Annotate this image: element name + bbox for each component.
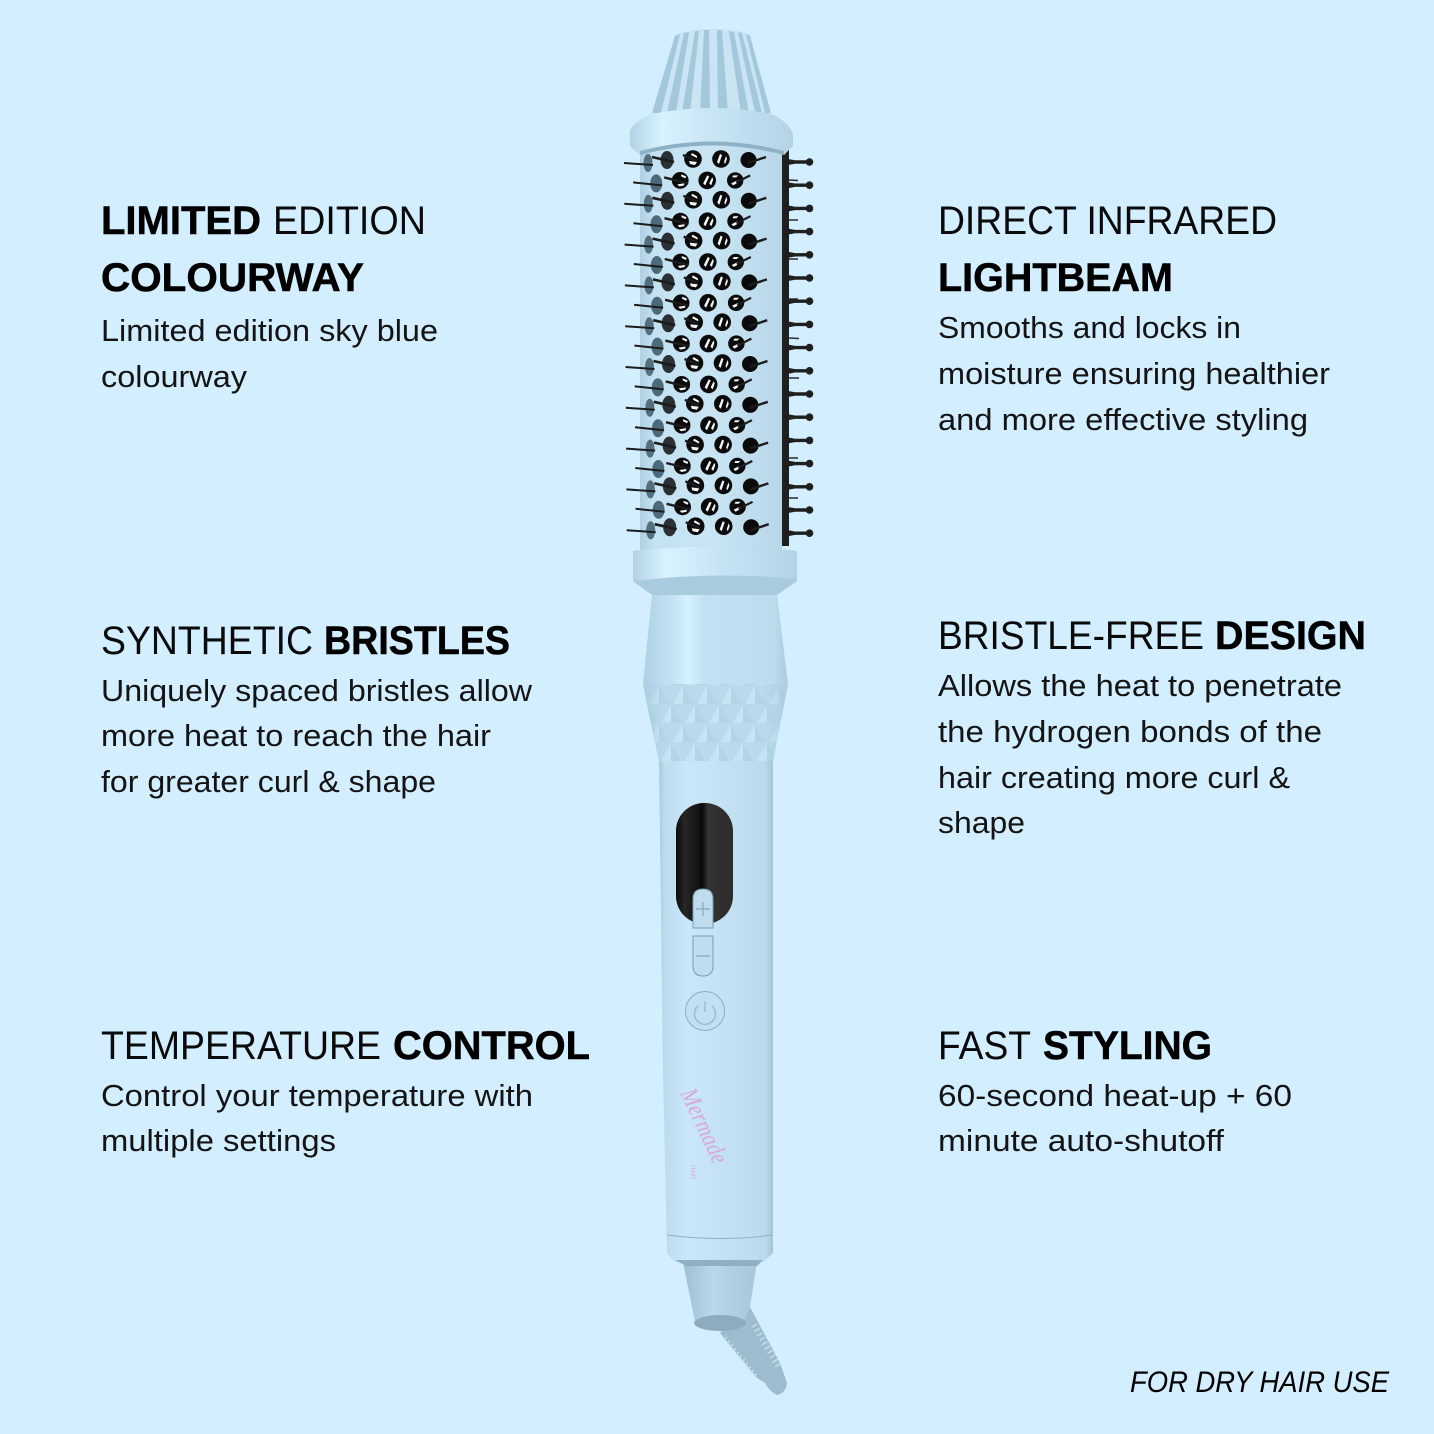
description — [101, 1078, 533, 1158]
heading — [101, 199, 426, 300]
description: shape — [938, 805, 1025, 840]
minus button — [693, 936, 713, 976]
description: Allows the heat to penetrate — [938, 668, 1342, 703]
product: thermal brush — [624, 29, 813, 1395]
feature: temperature control — [101, 1024, 590, 1158]
heading: EDITION — [273, 199, 426, 243]
description: Smooths and locks in — [938, 310, 1241, 345]
description: Control your temperature with — [101, 1078, 533, 1113]
heading — [938, 614, 1366, 658]
barrel — [624, 140, 813, 550]
description: hair creating more curl & — [938, 760, 1290, 795]
control panel — [676, 803, 733, 1030]
feature: direct infrared lightbeam — [938, 199, 1330, 437]
description: more heat to reach the hair — [101, 718, 491, 753]
heading: DIRECT INFRARED — [938, 199, 1277, 243]
description: moisture ensuring healthier — [938, 356, 1330, 391]
heading: LIGHTBEAM — [938, 256, 1173, 300]
description — [938, 668, 1342, 840]
heading: CONTROL — [393, 1024, 590, 1068]
feature: fast styling — [938, 1024, 1292, 1158]
description: and more effective styling — [938, 402, 1308, 437]
lower collar — [633, 546, 797, 595]
heading: STYLING — [1043, 1024, 1212, 1068]
description — [938, 310, 1330, 437]
heading: COLOURWAY — [101, 256, 364, 300]
plus button — [693, 889, 713, 928]
right comb bristles — [782, 150, 813, 546]
heading: TEMPERATURE — [101, 1024, 381, 1068]
description: Uniquely spaced bristles allow — [101, 673, 533, 708]
brand logo: Mermade — [674, 1083, 733, 1168]
heading: BRISTLE-FREE — [938, 614, 1204, 658]
footnote: FOR DRY HAIR USE — [1130, 1366, 1390, 1399]
heading: BRISTLES — [324, 619, 510, 663]
bristle holes — [624, 150, 769, 539]
power button — [686, 992, 724, 1030]
description — [101, 673, 533, 799]
heading — [938, 199, 1277, 300]
feature: limited edition colourway — [101, 199, 438, 394]
description: colourway — [101, 359, 248, 394]
description — [101, 313, 438, 394]
display window — [676, 803, 733, 924]
description: minute auto-shutoff — [938, 1123, 1224, 1158]
heading — [101, 619, 510, 663]
cord — [720, 1307, 787, 1395]
description: Limited edition sky blue — [101, 313, 438, 348]
neck — [643, 595, 788, 684]
knurled grip — [643, 684, 788, 761]
description: the hydrogen bonds of the — [938, 714, 1322, 749]
feature: synthetic bristles — [101, 619, 533, 799]
heading — [938, 1024, 1212, 1068]
heading — [101, 1024, 590, 1068]
description — [938, 1078, 1292, 1158]
heading: FAST — [938, 1024, 1031, 1068]
feature: bristle-free design — [938, 614, 1366, 840]
cable cone — [683, 1262, 757, 1331]
description: 60-second heat-up + 60 — [938, 1078, 1292, 1113]
heading: LIMITED — [101, 199, 261, 243]
heading: SYNTHETIC — [101, 619, 313, 663]
brand logo: HAIR — [689, 1165, 695, 1180]
handle — [659, 760, 773, 1266]
description: multiple settings — [101, 1123, 336, 1158]
top collar — [630, 108, 793, 155]
top cone cap — [651, 29, 771, 116]
description: for greater curl & shape — [101, 764, 436, 799]
heading: DESIGN — [1215, 614, 1366, 658]
